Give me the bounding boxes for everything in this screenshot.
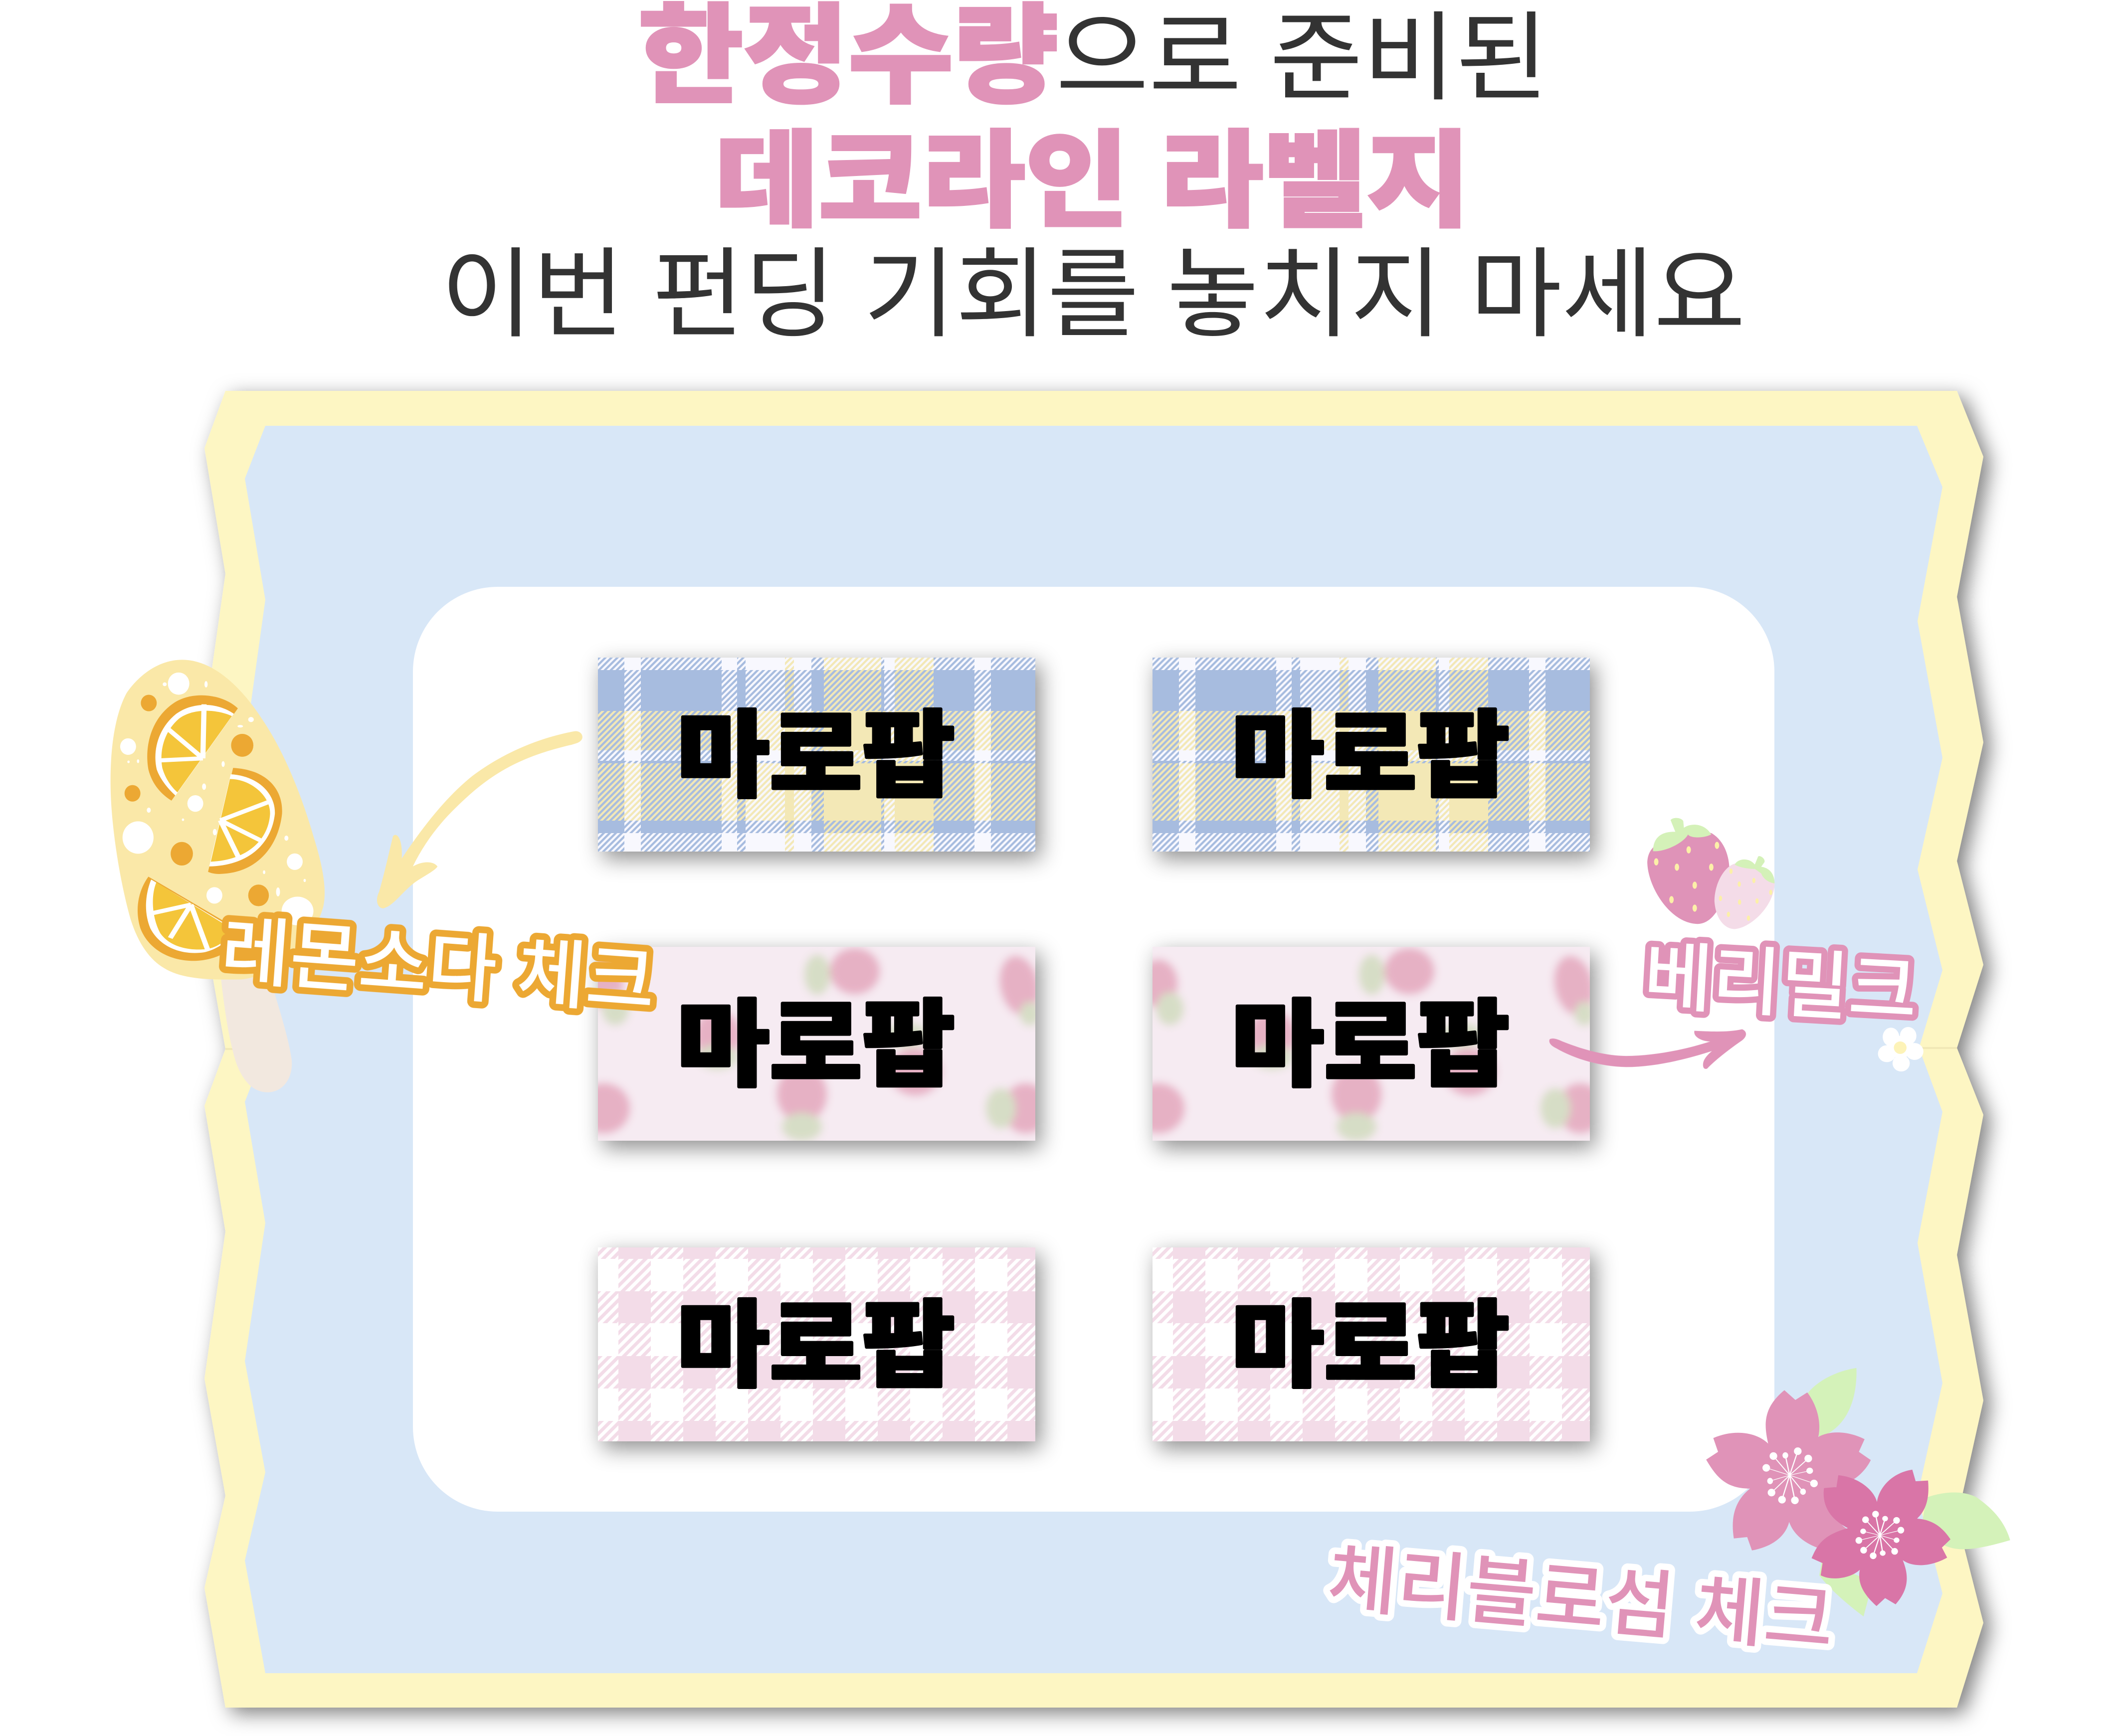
- big strawberry: [1647, 818, 1730, 924]
- arrow: pink berry arrow: [1549, 1029, 1746, 1069]
- icon: white daisy: [1878, 1027, 1924, 1071]
- icon: lemon popsicle: [111, 660, 325, 1092]
- small strawberry: [1715, 856, 1775, 929]
- card: lemon soda check 2: 마로팝: [1231, 703, 1510, 809]
- card: cherry blossom check 2: [1153, 1247, 1590, 1441]
- card: berry milk 1: 마로팝: [677, 993, 955, 1098]
- lemon slice 2: [208, 768, 282, 874]
- title: [441, 0, 1745, 349]
- card: cherry blossom check 1: [598, 1247, 1035, 1441]
- card: cherry blossom check 1: 마로팝: [677, 1293, 955, 1399]
- card: berry milk 2: [1133, 947, 1603, 1141]
- title line 1: 으로 준비된: [1056, 4, 1548, 113]
- label: lemon soda check: 레몬소다 체크: [218, 908, 658, 1024]
- icon: cherry blossoms: [1706, 1368, 2010, 1616]
- panel: blue inner area: [245, 426, 1942, 1673]
- card: berry milk 2: 마로팝: [1231, 993, 1510, 1098]
- popsicle body: [111, 660, 325, 980]
- title line 2: 데코라인 라벨지: [715, 123, 1470, 240]
- label: berry milk: 베리밀크: [1642, 934, 1920, 1034]
- panel: zigzag yellow frame: [204, 391, 1983, 1708]
- card: lemon soda check 1: 마로팝: [677, 703, 955, 809]
- card: lemon soda check 2: [1153, 658, 1590, 852]
- card: cherry blossom check 2: 마로팝: [1231, 1293, 1510, 1399]
- label: cherry blossom check: 체리블로섬 체크: [1325, 1536, 1837, 1663]
- icon: strawberries: [1647, 818, 1775, 929]
- popsicle dots: [125, 695, 269, 906]
- title line 3: 이번 펀딩 기회를 놓치지 마세요: [441, 240, 1745, 349]
- lemon slice 1: [147, 695, 238, 801]
- card: lemon soda check 1: [598, 658, 1035, 852]
- card: berry milk 1: [578, 947, 1049, 1141]
- leaves: [1805, 1368, 2010, 1616]
- blossom 1: [1706, 1390, 1871, 1551]
- title line 1: [638, 0, 1548, 116]
- lemon slice 3: [138, 876, 242, 961]
- panel: white rounded panel: [413, 587, 1774, 1512]
- popsicle stick: [220, 970, 292, 1092]
- blossom 2: [1812, 1470, 1950, 1606]
- arrow: yellow lemon arrow: [377, 731, 582, 908]
